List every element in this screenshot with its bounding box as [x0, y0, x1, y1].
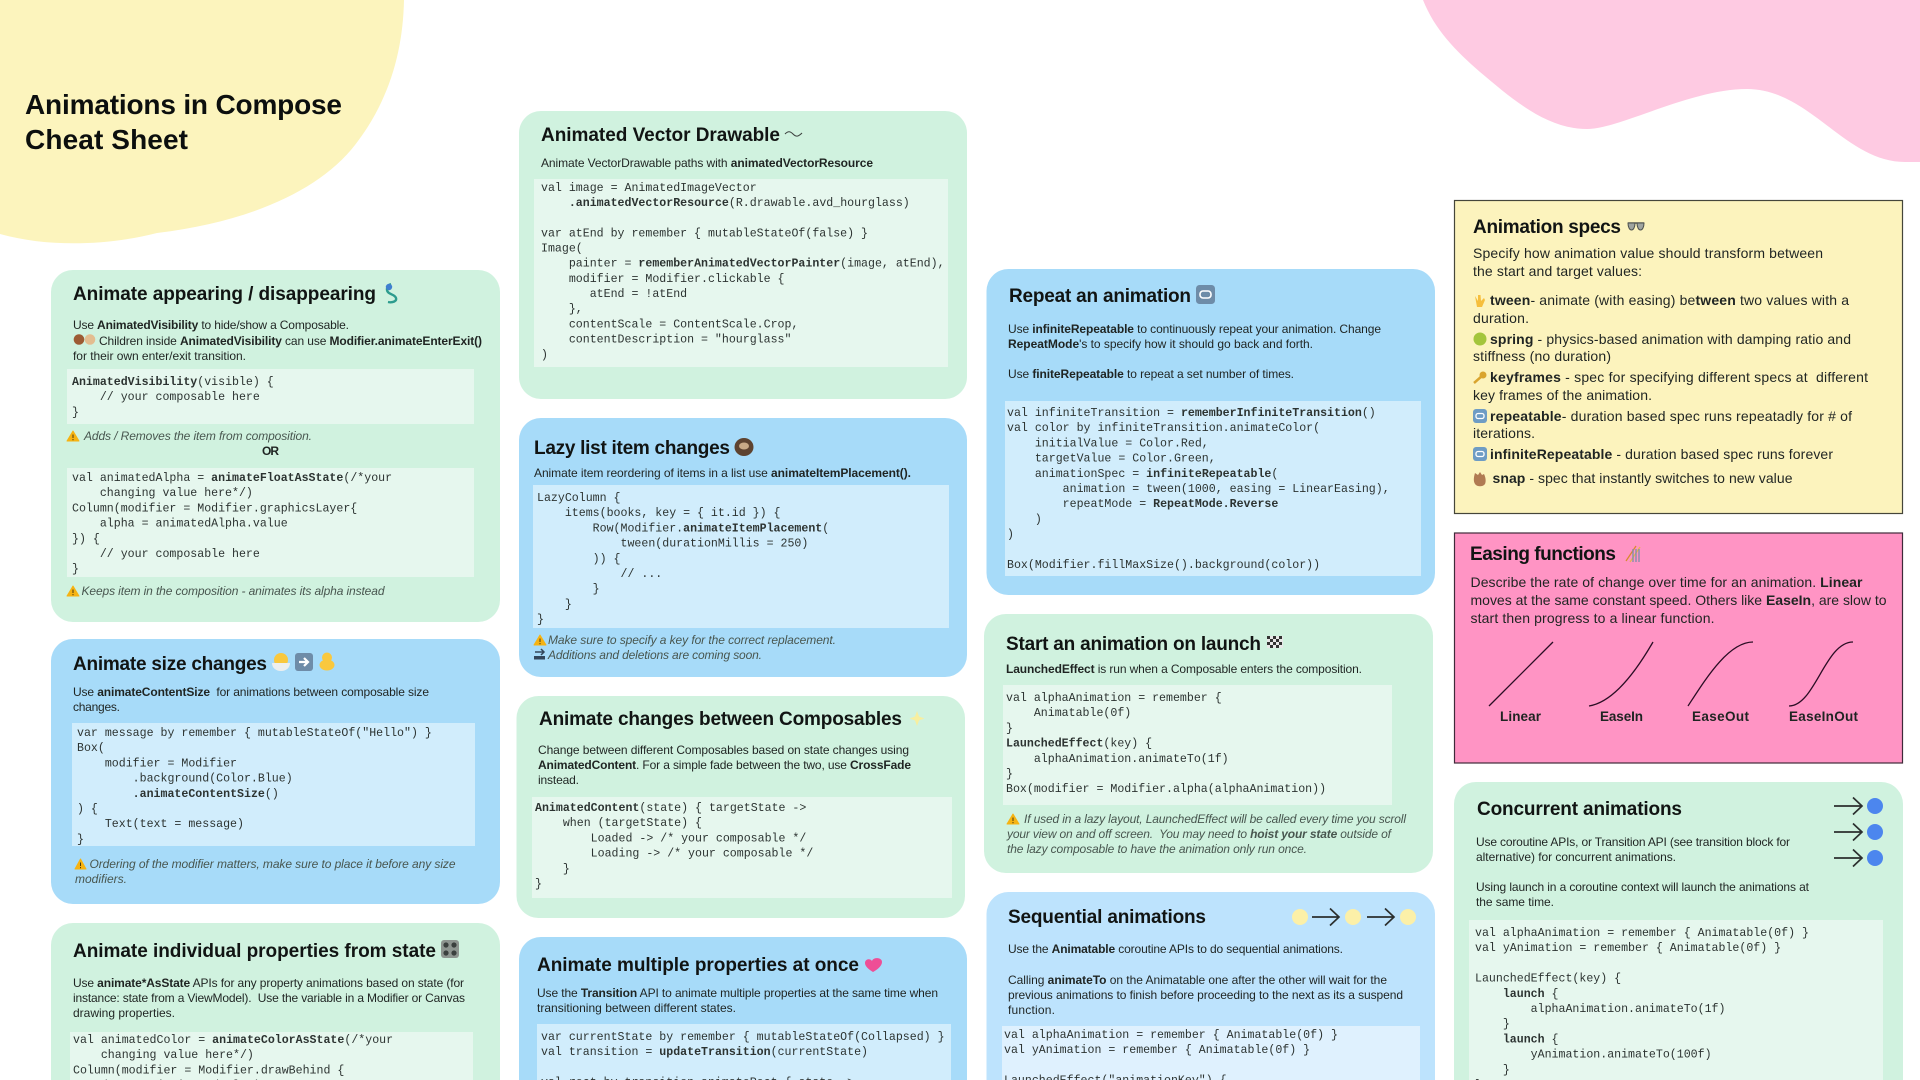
icon: warning: [67, 431, 79, 441]
spec: snap: snap - spec that instantly switches to new value: [1492, 470, 1793, 486]
heading: Start an animation on launch: [1006, 634, 1261, 655]
code block: infiniteRepeatable: repeatMode = RepeatMode.Reverse: [1007, 498, 1278, 511]
code block: animateColorAsState: val animatedColor = animateColorAsState(/*your: [73, 1034, 393, 1047]
intro text: [1473, 245, 1823, 279]
code block: launch: }: [1475, 1018, 1510, 1031]
description text: start then progress to a linear function.: [1470, 610, 1714, 626]
chart: linear curve: Linear: [1500, 709, 1542, 724]
icon: warning: [534, 635, 546, 645]
code block: animatedVectorResource: val image = AnimatedImageVector: [541, 182, 757, 195]
note: ordering: Ordering of the modifier matters, make sure to place it before any size: [90, 857, 456, 871]
code block: animateColorAsState: Column(modifier = Modifier.drawBehind {: [73, 1064, 344, 1077]
code block: LazyColumn: }: [537, 598, 572, 611]
code block: animatedVectorResource: contentScale = ContentScale.Crop,: [541, 318, 798, 331]
code block: launch: }: [1475, 1064, 1510, 1077]
code block: AnimatedContent: AnimatedContent(state) { targetState ->: [535, 802, 806, 815]
code block: sequential: [1002, 1026, 1420, 1080]
title: [25, 89, 342, 155]
code block: LazyColumn: LazyColumn {: [537, 492, 620, 505]
code block: launch: val yAnimation = remember { Animatable(0f) }: [1475, 942, 1781, 955]
panel: animate changes between composables: [516, 696, 965, 918]
decorative blob: pink top right: [1423, 0, 1920, 162]
icon: repeat: [1196, 285, 1215, 304]
heading: Animate multiple properties at once: [537, 955, 859, 976]
description text: for their own enter/exit transition.: [73, 349, 246, 363]
description text: [73, 318, 482, 363]
panel: animate appearing / disappearing: [51, 270, 500, 622]
note: lazy layout: If used in a lazy layout, LaunchedEffect will be called every time you scroll: [1024, 812, 1406, 826]
code block: animateFloatAsState: Column(modifier = Modifier.graphicsLayer{: [72, 502, 357, 515]
description text: [73, 976, 465, 1020]
code block: LazyColumn: )) {: [537, 553, 620, 566]
icon: checkered flag: [1267, 636, 1283, 648]
code block: launch: yAnimation.animateTo(100f): [1475, 1049, 1712, 1062]
icon: control knobs: [441, 940, 459, 958]
code block: animateContentSize: modifier = Modifier: [77, 757, 237, 770]
description text: Use animateContentSize for animations between composable size: [73, 685, 429, 699]
code block: animateFloatAsState: // your composable here: [72, 548, 260, 561]
description text: Calling animateTo on the Animatable one after the other will wait for the: [1008, 973, 1387, 987]
code block: animateFloatAsState: changing value here*/): [72, 487, 253, 500]
panel: start an animation on launch: [984, 614, 1433, 873]
heading: Repeat an animation: [1009, 286, 1191, 307]
code block: animatedVectorResource: [534, 179, 948, 367]
heading: Sequential animations: [1008, 907, 1206, 928]
heading: Lazy list item changes: [534, 438, 730, 459]
description text: previous animations to finish before proceeding to the next as its a suspend: [1008, 988, 1403, 1002]
icon: sparkles: [910, 711, 924, 726]
code block: LaunchedEffect: alphaAnimation.animateTo(1f): [1006, 753, 1229, 766]
code block: launch: LaunchedEffect(key) {: [1475, 973, 1621, 986]
note: adds removes: Adds / Removes the item from composition.: [83, 429, 312, 443]
description text: [1470, 574, 1887, 626]
code block: infiniteRepeatable: Box(Modifier.fillMaxSize().background(color)): [1007, 559, 1320, 572]
panel: animation specs: [1454, 200, 1902, 514]
note: lazy layout: the lazy composable to have the animation only run once.: [1007, 842, 1307, 856]
spec: keyframes: [1473, 369, 1868, 403]
heading: Easing functions: [1470, 544, 1616, 565]
spec: repeatable: repeatable- duration based spec runs repeatadly for # of: [1490, 408, 1852, 424]
code block: animateContentSize: var message by remember { mutableStateOf("Hello") }: [77, 727, 432, 740]
code block: AnimatedVisibility: }: [72, 406, 79, 419]
spec: tween: [1473, 292, 1849, 326]
description text: RepeatMode's to specify how it should go back and forth.: [1008, 337, 1313, 351]
heading: Animated Vector Drawable: [541, 125, 780, 146]
description text: Use infiniteRepeatable to continuously repeat your animation. Change: [1008, 322, 1381, 336]
code block: animateFloatAsState: }: [72, 563, 79, 576]
code block: animatedVectorResource: var atEnd by remember { mutableStateOf(false) }: [541, 227, 868, 240]
code block: LazyColumn: [533, 485, 949, 628]
icon: genie: [386, 284, 396, 302]
spec: repeatable: [1473, 408, 1852, 441]
chart: ease in curve: [1589, 642, 1653, 724]
code block: infiniteRepeatable: animation = tween(1000, easing = LinearEasing),: [1007, 483, 1390, 496]
description text: instead.: [538, 773, 579, 787]
heading: Animate changes between Composables: [539, 709, 902, 730]
code block: launch: val alphaAnimation = remember { Animatable(0f) }: [1475, 927, 1809, 940]
code block: LaunchedEffect: Animatable(0f): [1006, 707, 1131, 720]
code block: updateTransition: val transition = updateTransition(currentState): [541, 1046, 868, 1059]
chart: ease out curve: [1688, 642, 1753, 724]
description text: [537, 986, 938, 1015]
description text: instance: state from a ViewModel). Use the variable in a Modifier or Canvas: [73, 991, 465, 1005]
description text: drawing properties.: [73, 1006, 175, 1020]
code block: launch: launch {: [1475, 988, 1559, 1001]
code block: infiniteRepeatable: ): [1007, 513, 1042, 526]
chart: ease in out curve: EaseInOut: [1789, 709, 1858, 724]
code block: animateFloatAsState: val animatedAlpha = animateFloatAsState(/*your: [72, 472, 392, 485]
note: lazy layout: your view on and off screen. You may need to hoist your state outside of: [1006, 827, 1393, 841]
description text: Describe the rate of change over time for an animation. Linear: [1470, 574, 1863, 590]
description text: Use the Transition API to animate multiple properties at the same time when: [537, 986, 938, 1000]
note: ordering: modifiers.: [75, 872, 127, 886]
code block: AnimatedContent: [532, 797, 952, 898]
description text: moves at the same constant speed. Others like EaseIn, are slow to: [1470, 592, 1887, 608]
icon: wave: [785, 132, 802, 136]
code block: launch: launch {: [1475, 1033, 1559, 1046]
chart: ease in out curve: [1789, 642, 1858, 724]
spec: spring: [1473, 331, 1851, 364]
heading: Animate appearing / disappearing: [73, 284, 376, 305]
spec: tween: tween- animate (with easing) between two values with a: [1490, 292, 1849, 308]
description text: Use animate*AsState APIs for any property animations based on state (for: [73, 976, 464, 990]
code block: launch: alphaAnimation.animateTo(1f): [1475, 1003, 1725, 1016]
spec: keyframes: keyframes - spec for specifying different specs at different: [1490, 369, 1868, 385]
icon: concurrent arrows and dots: [1834, 798, 1883, 866]
panel: animate size changes: [51, 639, 500, 904]
description text: Animate item reordering of items in a list use animateItemPlacement().: [534, 466, 911, 480]
heading: Concurrent animations: [1477, 799, 1682, 820]
title: Animations in Compose: [25, 89, 342, 120]
decorative blob: yellow top left: [0, 0, 404, 243]
code block: LazyColumn: }: [537, 614, 544, 627]
description text: changes.: [73, 700, 120, 714]
description text: Use finiteRepeatable to repeat a set number of times.: [1008, 367, 1294, 381]
code block: LaunchedEffect: LaunchedEffect(key) {: [1006, 738, 1152, 751]
description text: [73, 685, 429, 714]
code block: LaunchedEffect: }: [1006, 722, 1013, 735]
description text: function.: [1008, 1003, 1055, 1017]
code block: infiniteRepeatable: val infiniteTransition = rememberInfiniteTransition(): [1007, 407, 1376, 420]
code block: infiniteRepeatable: val color by infiniteTransition.animateColor(: [1007, 422, 1320, 435]
note: additions and deletions: Additions and deletions are coming soon.: [547, 648, 762, 662]
code block: animateColorAsState: [70, 1032, 473, 1080]
note: specify a key: Make sure to specify a key for the correct replacement.: [548, 633, 836, 647]
code block: infiniteRepeatable: [1005, 401, 1421, 576]
code block: animateContentSize: .animateContentSize(): [77, 788, 279, 801]
description text: alternative) for concurrent animations.: [1476, 850, 1676, 864]
code block: LaunchedEffect: val alphaAnimation = remember {: [1006, 692, 1222, 705]
code block: animateContentSize: Box(: [77, 742, 105, 755]
code block: sequential: val yAnimation = remember { Animatable(0f) }: [1004, 1044, 1310, 1057]
code block: LazyColumn: // ...: [537, 568, 662, 581]
code block: animateContentSize: }: [77, 833, 84, 846]
icon: chick: [320, 652, 334, 670]
code block: LaunchedEffect: }: [1006, 768, 1013, 781]
heading: Animate size changes: [73, 654, 267, 675]
code block: AnimatedContent: when (targetState) {: [535, 817, 702, 830]
icon: hearts: [865, 958, 882, 972]
code block: infiniteRepeatable: ): [1007, 529, 1014, 542]
description text: [1008, 322, 1381, 381]
code block: LazyColumn: }: [537, 583, 600, 596]
code block: LaunchedEffect: [1003, 685, 1392, 805]
code block: AnimatedVisibility: // your composable here: [72, 391, 260, 404]
icon: hatching chick: [272, 653, 290, 671]
description text: Use the Animatable coroutine APIs to do sequential animations.: [1008, 942, 1343, 956]
panel: easing functions: [1454, 533, 1902, 763]
chart: ease in curve: EaseIn: [1600, 709, 1643, 724]
chart: linear curve: [1489, 642, 1553, 724]
panel: lazy list item changes: [519, 418, 967, 677]
code block: animateContentSize: [72, 723, 475, 846]
code block: animatedVectorResource: .animatedVectorResource(R.drawable.avd_hourglass): [541, 197, 910, 210]
description text: [538, 743, 911, 787]
description text: LaunchedEffect is run when a Composable enters the composition.: [1006, 662, 1362, 676]
code block: launch: [1469, 920, 1883, 1080]
code block: animateContentSize: Text(text = message): [77, 818, 244, 831]
code block: infiniteRepeatable: initialValue = Color.Red,: [1007, 437, 1209, 450]
description text: the same time.: [1476, 895, 1554, 909]
code block: AnimatedVisibility: [67, 369, 474, 424]
code block: AnimatedContent: }: [535, 863, 570, 876]
note: lazy layout: [1006, 812, 1406, 856]
code block: AnimatedVisibility: AnimatedVisibility(visible) {: [72, 376, 274, 389]
icon: glasses: [1628, 223, 1644, 230]
panel: repeat an animation: [986, 269, 1435, 595]
panel: animate individual properties: [51, 923, 500, 1080]
OR label: OR: [262, 444, 279, 458]
code block: animateFloatAsState: alpha = animatedAlpha.value: [72, 518, 288, 531]
code block: LazyColumn: tween(durationMillis = 250): [537, 538, 808, 551]
code block: animatedVectorResource: Image(: [541, 243, 583, 256]
description text: Use coroutine APIs, or Transition API (see transition block for: [1476, 835, 1790, 849]
code block: animatedVectorResource: painter = rememberAnimatedVectorPainter(image, atEnd),: [541, 258, 945, 271]
code block: LazyColumn: items(books, key = { it.id }) {: [537, 507, 781, 520]
code block: animateContentSize: .background(Color.Blue): [77, 773, 293, 786]
code block: AnimatedContent: }: [535, 878, 542, 891]
icon: abacus: [1626, 546, 1640, 562]
code block: animatedVectorResource: contentDescription = "hourglass": [541, 334, 791, 347]
code block: updateTransition: [537, 1024, 951, 1080]
code block: animatedVectorResource: atEnd = !atEnd: [541, 288, 687, 301]
intro text: Specify how animation value should transform between: [1473, 245, 1823, 261]
icon: warning: [1007, 814, 1019, 824]
icon: arrow button: [295, 653, 313, 671]
spec: repeatable: iterations.: [1473, 425, 1535, 441]
description text: Using launch in a coroutine context will launch the animations at: [1476, 880, 1810, 894]
spec: spring: stiffness (no duration): [1473, 348, 1611, 364]
panel: concurrent animations: [1454, 782, 1903, 1080]
icon: sequence of dots and arrows: [1292, 908, 1416, 926]
description text: Animate VectorDrawable paths with animatedVectorResource: [541, 156, 873, 170]
intro text: the start and target values:: [1473, 263, 1642, 279]
code block: animatedVectorResource: modifier = Modifier.clickable {: [541, 273, 785, 286]
panel: animate multiple properties: [519, 937, 967, 1080]
icon: two children: [74, 334, 95, 345]
code block: animateFloatAsState: }) {: [72, 533, 100, 546]
code block: AnimatedContent: Loaded -> /* your composable */: [535, 832, 806, 845]
note: ordering: [75, 857, 456, 886]
panel: animated vector drawable: [519, 111, 967, 399]
spec: spring: spring - physics-based animation with damping ratio and: [1490, 331, 1851, 347]
description text: [1008, 942, 1403, 1017]
spec: tween: duration.: [1473, 310, 1529, 326]
icon: warning: [67, 586, 79, 596]
spec: infiniteRepeatable: infiniteRepeatable - duration based spec runs forever: [1490, 446, 1833, 462]
description text: [1476, 835, 1810, 909]
code block: animatedVectorResource: ): [541, 349, 548, 362]
description text: transitioning between different states.: [537, 1001, 736, 1015]
description text: AnimatedContent. For a simple fade between the two, use CrossFade: [538, 758, 911, 772]
description text: Use AnimatedVisibility to hide/show a Composable.: [73, 318, 349, 332]
heading: Animation specs: [1473, 217, 1621, 238]
code block: animatedVectorResource: },: [541, 303, 583, 316]
code block: AnimatedContent: Loading -> /* your composable */: [535, 848, 813, 861]
chart: ease out curve: EaseOut: [1692, 709, 1750, 724]
code block: animateColorAsState: changing value here*/): [73, 1049, 254, 1062]
icon: sloth: [734, 438, 754, 456]
panel: sequential animations: [986, 892, 1435, 1080]
heading: Animate individual properties from state: [73, 941, 436, 962]
code block: sequential: val alphaAnimation = remember { Animatable(0f) }: [1004, 1029, 1338, 1042]
code block: infiniteRepeatable: targetValue = Color.Green,: [1007, 453, 1216, 466]
code block: infiniteRepeatable: animationSpec = infiniteRepeatable(: [1007, 468, 1278, 481]
title: Cheat Sheet: [25, 124, 188, 155]
description text: Change between different Composables based on state changes using: [538, 743, 909, 757]
code block: animateContentSize: ) {: [77, 803, 98, 816]
code block: updateTransition: var currentState by remember { mutableStateOf(Collapsed) }: [541, 1031, 945, 1044]
code block: LazyColumn: Row(Modifier.animateItemPlacement(: [537, 522, 829, 535]
description text: Children inside AnimatedVisibility can use Modifier.animateEnterExit(): [99, 334, 482, 348]
note: keeps item: Keeps item in the composition - animates its alpha instead: [82, 584, 385, 598]
code block: LaunchedEffect: Box(modifier = Modifier.alpha(alphaAnimation)): [1006, 783, 1326, 796]
code block: animateFloatAsState: [67, 468, 474, 577]
icon: soon arrow: [534, 649, 545, 660]
icon: warning: [75, 859, 86, 869]
spec: keyframes: key frames of the animation.: [1473, 387, 1652, 403]
